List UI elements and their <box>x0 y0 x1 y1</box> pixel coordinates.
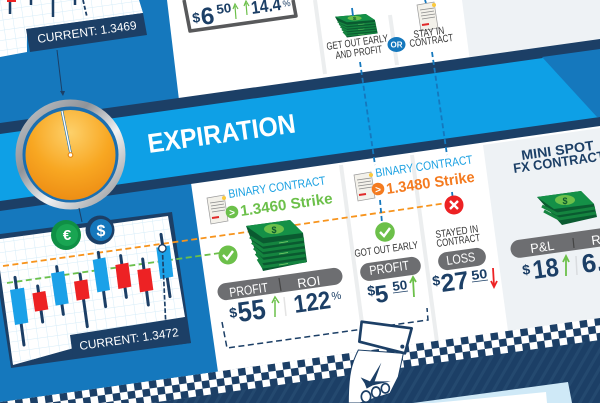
results: stayed in contract: LOSS <box>445 249 476 268</box>
arrow: clock to chart <box>79 208 82 222</box>
results: profit and roi: 122 <box>292 286 332 319</box>
label: current 1.3472: CURRENT: 1.3472 <box>78 325 180 353</box>
dashed connector one <box>360 62 382 223</box>
results: profit and roi: % <box>331 290 342 303</box>
icon: money stack right <box>537 191 597 225</box>
icon: money stack left <box>246 220 307 271</box>
results: stayed in contract: CONTRACT <box>436 232 481 250</box>
icon: green check middle <box>375 222 395 242</box>
panel: binary contract 1.3480: BINARY CONTRACT <box>374 152 474 180</box>
results: mini spot: P&L <box>529 238 555 256</box>
results: profit and roi: ROI <box>296 273 321 291</box>
results: got out early <box>354 239 422 309</box>
text: get out early: GET OUT EARLY <box>326 32 389 53</box>
results: got out early: 50 <box>391 277 408 294</box>
icon: contract document <box>207 195 228 224</box>
results: stayed in contract: 50 <box>470 266 488 283</box>
results: mini spot <box>509 223 600 285</box>
icon: euro coin: € <box>63 227 72 244</box>
green strike line <box>7 253 220 283</box>
panel: binary contract 1.3480: > <box>375 185 381 196</box>
panel: top left blue <box>0 0 218 403</box>
panel: bottom screen <box>413 382 572 403</box>
results: stayed in contract: $ <box>431 272 441 289</box>
panel: binary contract 1.3460 <box>207 173 334 224</box>
icon: euro coin <box>51 220 81 250</box>
results: profit and roi: $ <box>228 304 238 321</box>
dashed connector two <box>432 52 453 200</box>
panel: binary contract 1.3460: BINARY CONTRACT <box>227 173 327 201</box>
icon: hand holding <box>348 322 412 403</box>
candlestick chart <box>10 234 173 345</box>
text: get out early <box>326 32 389 62</box>
top chart <box>0 0 143 57</box>
results: mini spot: 18 <box>531 252 561 285</box>
icon: red cross <box>444 196 464 214</box>
panel: bottom navy <box>150 340 600 403</box>
results: got out early: GOT OUT EARLY <box>354 239 419 260</box>
arrow: chart to clock <box>57 50 65 96</box>
panel: lower right grey <box>483 128 600 331</box>
label: current 1.3469: CURRENT: 1.3469 <box>36 18 138 46</box>
band right dark wedge <box>542 49 600 117</box>
top result box <box>184 0 296 31</box>
results: mini spot: $ <box>521 261 531 278</box>
lower chart frame <box>0 212 191 368</box>
results: profit and roi: PROFIT <box>228 280 269 300</box>
results: profit and roi: 55 <box>236 293 268 328</box>
panel: top right grey <box>462 0 600 62</box>
icon: dollar coin: $ <box>97 223 106 240</box>
top result box: $ <box>191 9 201 26</box>
panel: binary contract 1.3460: > <box>229 208 235 219</box>
icon: contract document two <box>354 172 375 201</box>
results: stayed in contract: STAYED IN <box>435 223 479 241</box>
text: stay in contract <box>409 25 454 50</box>
top result box: 6 <box>199 2 216 31</box>
panel: column separators <box>315 0 437 342</box>
icon: or badge <box>388 37 406 52</box>
icon: clock <box>16 100 126 210</box>
top result box: 50 <box>215 0 232 17</box>
results: got out early: 5 <box>373 280 390 309</box>
results: profit and roi <box>216 267 344 328</box>
label: current 1.3472 <box>70 317 191 358</box>
checkerboard strip <box>0 318 600 403</box>
panel: binary contract 1.3480 <box>354 152 476 201</box>
orange strike line <box>3 203 447 266</box>
icon: money stack top <box>335 14 378 37</box>
panel: expiration band <box>0 39 600 211</box>
label: current 1.3469 <box>26 13 147 52</box>
dashed bracket <box>222 308 428 348</box>
panel: binary contract 1.3460: 1.3460 Strike <box>239 190 334 220</box>
results: got out early: PROFIT <box>368 258 410 278</box>
panel: binary contract 1.3480: 1.3480 Strike <box>385 169 476 198</box>
icon: contract document top <box>417 2 438 31</box>
connector stubs top <box>352 0 426 16</box>
results: stayed in contract <box>431 223 497 298</box>
icon: money stack right: $ <box>562 196 568 206</box>
text: stay in contract: STAY IN <box>413 25 445 41</box>
icon: dollar coin <box>86 216 114 244</box>
text: stay in contract: CONTRACT <box>409 32 454 50</box>
text: get out early: AND PROFIT <box>335 43 383 62</box>
heading: mini spot fx contract: MINI SPOT <box>520 138 595 163</box>
icon: green check left <box>218 246 238 264</box>
icon: or badge: OR <box>390 40 403 50</box>
lower chart plot area <box>0 216 185 365</box>
heading: expiration: EXPIRATION <box>146 108 297 159</box>
results: got out early: $ <box>366 282 376 299</box>
results: stayed in contract: 27 <box>439 266 471 298</box>
